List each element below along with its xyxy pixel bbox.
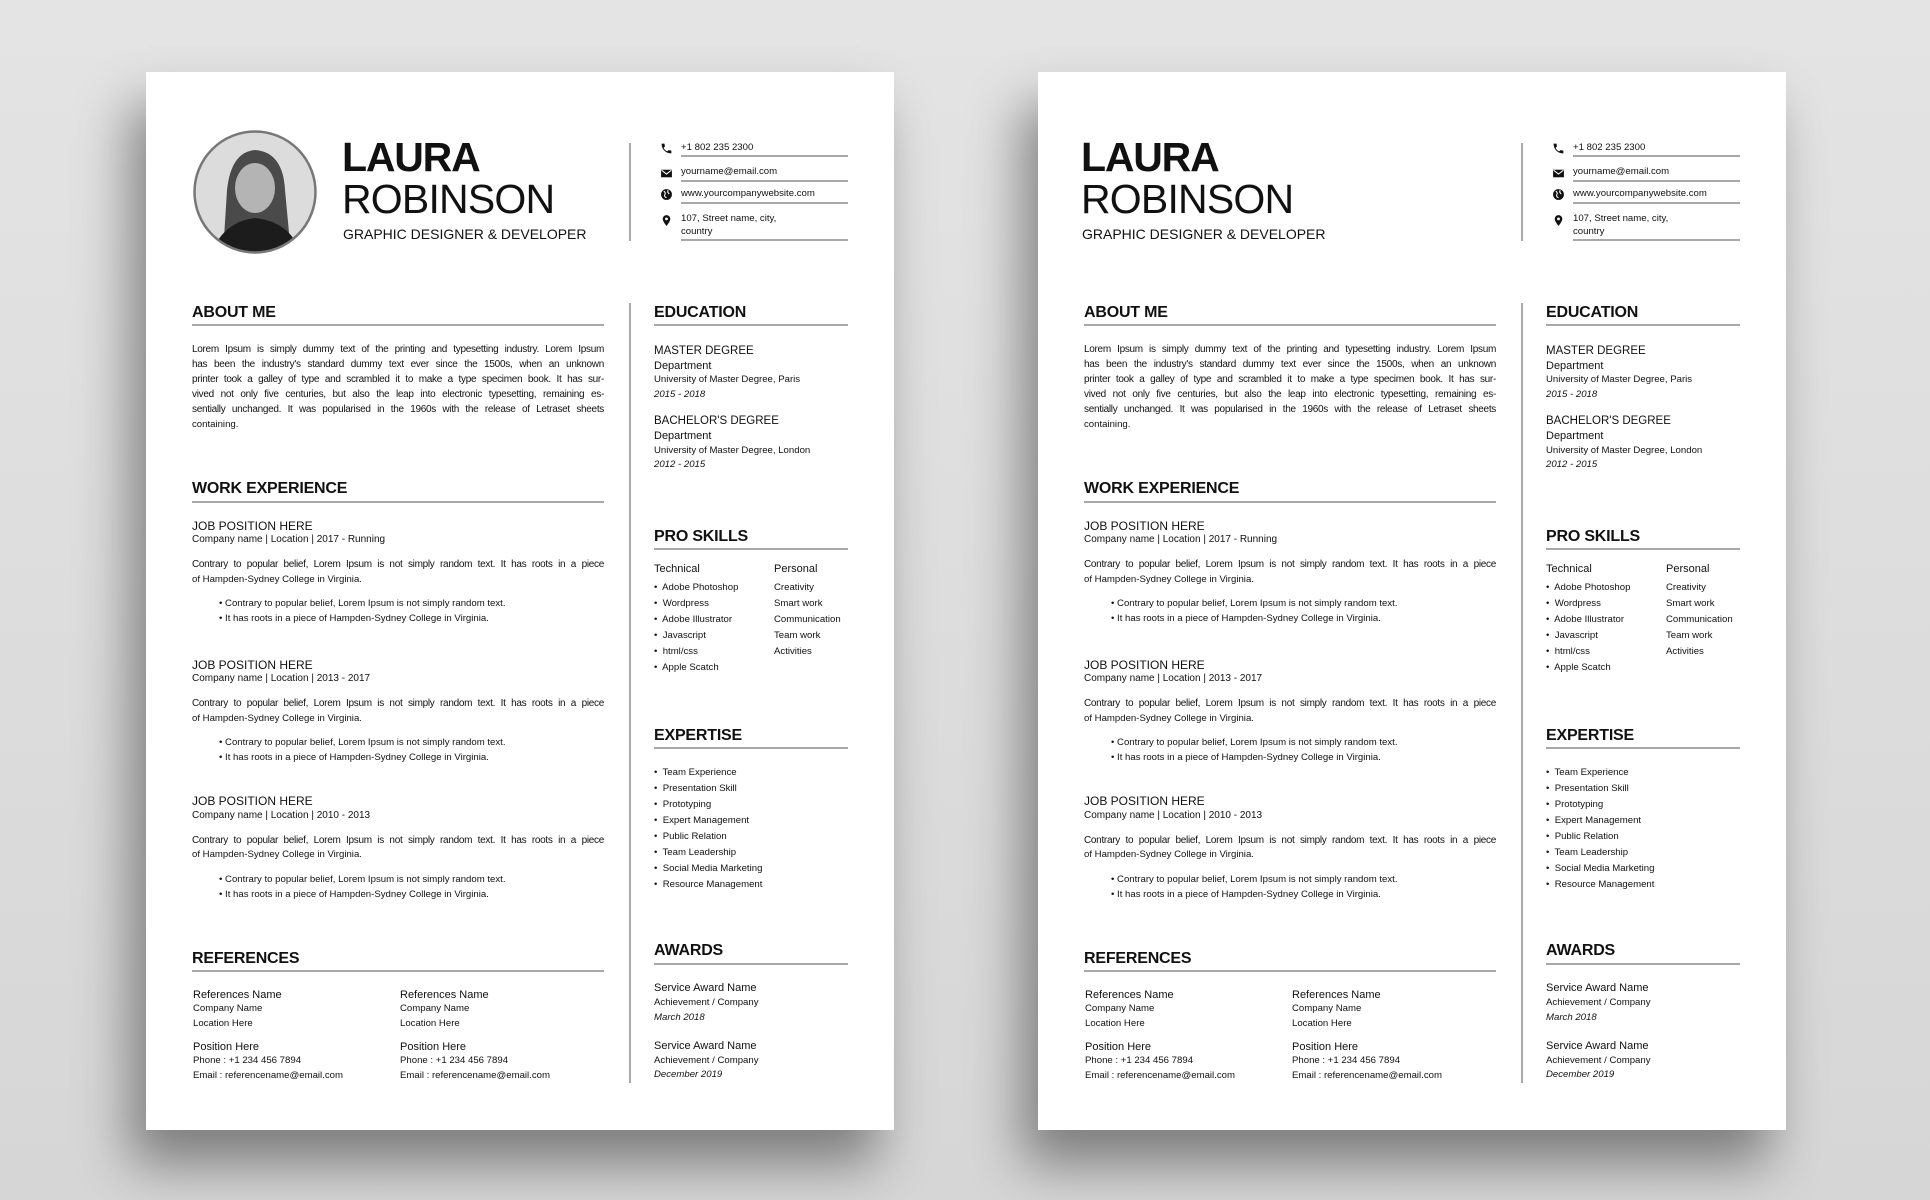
section: awards: March 2018 (1546, 1012, 1597, 1023)
section: work experience: WORK EXPERIENCE (192, 480, 347, 497)
section: pro skills: • Apple Scatch (1546, 662, 1611, 673)
section: references: Location Here (400, 1018, 460, 1029)
section: references (1084, 950, 1496, 1081)
section: references: Phone : +1 234 456 7894 (193, 1055, 301, 1066)
contacts: 107, Street name, city, (681, 213, 776, 224)
section: awards: Service Award Name (1546, 1040, 1649, 1052)
section: pro skills: • Adobe Illustrator (1546, 614, 1624, 625)
section: about me (1084, 304, 1496, 430)
job 1: • It has roots in a piece of Hampden-Sydney College in Virginia. (1111, 613, 1381, 624)
icon: email (661, 170, 672, 178)
section: pro skills: Technical (1546, 563, 1592, 575)
section: references: Email : referencename@email.com (400, 1070, 550, 1081)
section: awards (654, 942, 848, 1080)
section: expertise: • Social Media Marketing (654, 863, 762, 874)
section: pro skills: Smart work (774, 598, 823, 609)
icon: globe (661, 189, 672, 200)
section: pro skills: Smart work (1666, 598, 1715, 609)
section: expertise: • Team Experience (1546, 767, 1629, 778)
section: expertise: • Team Leadership (1546, 847, 1628, 858)
section: pro skills (654, 528, 848, 673)
section: education: EDUCATION (1546, 304, 1638, 321)
section: expertise: • Prototyping (1546, 799, 1603, 810)
section: references: Phone : +1 234 456 7894 (1085, 1055, 1193, 1066)
name (342, 134, 587, 242)
contacts: yourname@email.com (1573, 166, 1669, 177)
section: pro skills: • Adobe Illustrator (654, 614, 732, 625)
section: education: Department (1546, 430, 1603, 442)
job 2: • Contrary to popular belief, Lorem Ipsum is not simply random text. (219, 737, 506, 748)
section: references: Company Name (1292, 1003, 1361, 1014)
section: pro skills: • Adobe Photoshop (654, 582, 738, 593)
job 3: of Hampden-Sydney College in Virginia. (192, 849, 362, 860)
section: awards: Achievement / Company (654, 1055, 759, 1066)
panel: left resume page: GRAPHIC DESIGNER & DEVELOPER (343, 226, 587, 242)
job 3 (192, 794, 604, 900)
section: education: 2015 - 2018 (1546, 389, 1597, 400)
job 1: of Hampden-Sydney College in Virginia. (192, 574, 362, 585)
section: education: University of Master Degree, Paris (654, 374, 800, 385)
job 3: Company name | Location | 2010 - 2013 (1084, 810, 1262, 821)
job 1: • Contrary to popular belief, Lorem Ipsum is not simply random text. (219, 598, 506, 609)
section: references: Company Name (1085, 1003, 1154, 1014)
section: awards: Achievement / Company (1546, 1055, 1651, 1066)
name (1081, 134, 1326, 242)
job 2 (192, 658, 604, 763)
section: work experience (1084, 480, 1496, 900)
job 2: of Hampden-Sydney College in Virginia. (1084, 713, 1254, 724)
job 2: • It has roots in a piece of Hampden-Sydney College in Virginia. (219, 752, 489, 763)
section: education: EDUCATION (654, 304, 746, 321)
job 2: • It has roots in a piece of Hampden-Sydney College in Virginia. (1111, 752, 1381, 763)
job 3: of Hampden-Sydney College in Virginia. (1084, 849, 1254, 860)
section: awards: March 2018 (654, 1012, 705, 1023)
job 3: Contrary to popular belief, Lorem Ipsum is not simply random text. It has roots in a piece (192, 835, 604, 846)
job 3 (1084, 794, 1496, 900)
contacts: +1 802 235 2300 (681, 142, 753, 153)
panel: right resume page: LAURA (1081, 134, 1218, 180)
section: references: References Name (400, 989, 489, 1001)
job 1: Contrary to popular belief, Lorem Ipsum is not simply random text. It has roots in a piece (1084, 559, 1496, 570)
section: about me: printer took a galley of type and scrambled it to make a type specimen book. It has sur- (1084, 374, 1496, 385)
section: pro skills: • Apple Scatch (654, 662, 719, 673)
icon: email (1553, 170, 1564, 178)
job 2: Contrary to popular belief, Lorem Ipsum is not simply random text. It has roots in a piece (192, 698, 604, 709)
section: pro skills: Technical (654, 563, 700, 575)
section: education: 2012 - 2015 (654, 459, 705, 470)
section: references: Email : referencename@email.com (193, 1070, 343, 1081)
section: references (192, 950, 604, 1081)
section: pro skills: Team work (1666, 630, 1712, 641)
section: expertise: • Prototyping (654, 799, 711, 810)
section: education: University of Master Degree, London (1546, 445, 1702, 456)
section: education: MASTER DEGREE (1546, 345, 1646, 357)
section: pro skills: Communication (774, 614, 841, 625)
contacts: country (681, 226, 712, 237)
section: references: Company Name (193, 1003, 262, 1014)
contacts (661, 142, 848, 241)
job 3: • Contrary to popular belief, Lorem Ipsum is not simply random text. (219, 874, 506, 885)
section: expertise: EXPERTISE (654, 727, 742, 744)
panel: left resume page: LAURA (342, 134, 479, 180)
section: pro skills: Activities (774, 646, 812, 657)
panel: left resume page: containing. (192, 419, 238, 430)
section: work experience: WORK EXPERIENCE (1084, 480, 1239, 497)
job 3: • Contrary to popular belief, Lorem Ipsum is not simply random text. (1111, 874, 1398, 885)
section: references: Email : referencename@email.com (1085, 1070, 1235, 1081)
contacts: www.yourcompanywebsite.com (1573, 188, 1707, 199)
section: about me: Lorem Ipsum is simply dummy text of the printing and typesetting industry. Lorem Ipsum (192, 344, 604, 355)
section: education: Department (654, 430, 711, 442)
section: awards: Service Award Name (1546, 982, 1649, 994)
section: references: Phone : +1 234 456 7894 (400, 1055, 508, 1066)
job 1: Contrary to popular belief, Lorem Ipsum is not simply random text. It has roots in a piece (192, 559, 604, 570)
section: expertise: • Social Media Marketing (1546, 863, 1654, 874)
section: references: REFERENCES (192, 950, 299, 967)
job 3: JOB POSITION HERE (1084, 794, 1205, 808)
panel: right resume page: ROBINSON (1081, 176, 1293, 222)
section: references: REFERENCES (1084, 950, 1191, 967)
section: about me: ABOUT ME (1084, 304, 1168, 321)
section: awards: Achievement / Company (1546, 997, 1651, 1008)
section: awards: Achievement / Company (654, 997, 759, 1008)
section: expertise: • Expert Management (1546, 815, 1641, 826)
section: references: Position Here (193, 1041, 259, 1053)
section: references: Location Here (193, 1018, 253, 1029)
section: pro skills: Creativity (774, 582, 814, 593)
section: awards (1546, 942, 1740, 1080)
section: references: Position Here (1085, 1041, 1151, 1053)
job 2: of Hampden-Sydney College in Virginia. (192, 713, 362, 724)
job 1 (1084, 519, 1496, 624)
contacts: country (1573, 226, 1604, 237)
icon: location pin (1554, 215, 1562, 226)
icon: phone (662, 144, 672, 154)
icon: location pin (662, 215, 670, 226)
section: about me: has been the industry's standard dummy text ever since the 1500s, when an unknown (192, 359, 604, 370)
section: references: Phone : +1 234 456 7894 (1292, 1055, 1400, 1066)
panel: right resume page: containing. (1084, 419, 1130, 430)
job 2: Company name | Location | 2013 - 2017 (192, 673, 370, 684)
section: pro skills: • html/css (1546, 646, 1590, 657)
section: awards: Service Award Name (654, 982, 757, 994)
job 1: of Hampden-Sydney College in Virginia. (1084, 574, 1254, 585)
section: education: Department (654, 360, 711, 372)
panel: right resume page: GRAPHIC DESIGNER & DEVELOPER (1082, 226, 1326, 242)
contacts: www.yourcompanywebsite.com (681, 188, 815, 199)
panel: left resume page: ROBINSON (342, 176, 554, 222)
section: pro skills: PRO SKILLS (1546, 528, 1640, 545)
job 3: • It has roots in a piece of Hampden-Sydney College in Virginia. (1111, 889, 1381, 900)
section: pro skills: • Wordpress (654, 598, 709, 609)
job 3: JOB POSITION HERE (192, 794, 313, 808)
section: pro skills: Activities (1666, 646, 1704, 657)
job 3: Company name | Location | 2010 - 2013 (192, 810, 370, 821)
section: education: BACHELOR'S DEGREE (654, 415, 779, 427)
section: references: Location Here (1085, 1018, 1145, 1029)
section: pro skills: Personal (1666, 563, 1709, 575)
job 1: Company name | Location | 2017 - Running (192, 534, 385, 545)
contacts: 107, Street name, city, (1573, 213, 1668, 224)
section: about me: printer took a galley of type and scrambled it to make a type specimen book. It has sur- (192, 374, 604, 385)
section: education: University of Master Degree, London (654, 445, 810, 456)
section: about me: vived not only five centuries, but also the leap into electronic typesetting, remaining es- (1084, 389, 1496, 400)
section: awards: Service Award Name (654, 1040, 757, 1052)
section: education: MASTER DEGREE (654, 345, 754, 357)
section: expertise: • Team Leadership (654, 847, 736, 858)
panel: left resume page (146, 72, 894, 1130)
section: education: University of Master Degree, Paris (1546, 374, 1692, 385)
section: education (654, 304, 848, 470)
contacts (1553, 142, 1740, 241)
section: awards: December 2019 (1546, 1069, 1614, 1080)
section: references: Company Name (400, 1003, 469, 1014)
section: expertise: • Resource Management (1546, 879, 1654, 890)
contacts: +1 802 235 2300 (1573, 142, 1645, 153)
section: expertise: • Public Relation (654, 831, 727, 842)
section: expertise: • Expert Management (654, 815, 749, 826)
job 2 (1084, 658, 1496, 763)
job 2: Contrary to popular belief, Lorem Ipsum is not simply random text. It has roots in a piece (1084, 698, 1496, 709)
section: pro skills: Team work (774, 630, 820, 641)
section: about me: ABOUT ME (192, 304, 276, 321)
photo (193, 130, 317, 254)
section: expertise (654, 727, 848, 890)
section: expertise: • Team Experience (654, 767, 737, 778)
section: work experience (192, 480, 604, 900)
section: expertise: • Presentation Skill (654, 783, 737, 794)
section: expertise: • Resource Management (654, 879, 762, 890)
section: awards: AWARDS (654, 942, 723, 959)
section: about me: vived not only five centuries, but also the leap into electronic typesetting, remaining es- (192, 389, 604, 400)
icon: globe (1553, 189, 1564, 200)
section: pro skills: • Adobe Photoshop (1546, 582, 1630, 593)
section: about me: has been the industry's standard dummy text ever since the 1500s, when an unknown (1084, 359, 1496, 370)
job 1: JOB POSITION HERE (1084, 519, 1205, 533)
section: expertise: • Public Relation (1546, 831, 1619, 842)
job 1: • Contrary to popular belief, Lorem Ipsum is not simply random text. (1111, 598, 1398, 609)
job 3: Contrary to popular belief, Lorem Ipsum is not simply random text. It has roots in a piece (1084, 835, 1496, 846)
section: about me: sentially unchanged. It was popularised in the 1960s with the release of Letraset sheets (1084, 404, 1496, 415)
job 2: • Contrary to popular belief, Lorem Ipsum is not simply random text. (1111, 737, 1398, 748)
job 2: Company name | Location | 2013 - 2017 (1084, 673, 1262, 684)
section: awards: AWARDS (1546, 942, 1615, 959)
job 1: Company name | Location | 2017 - Running (1084, 534, 1277, 545)
section: about me (192, 304, 604, 430)
section: pro skills: Creativity (1666, 582, 1706, 593)
panel: right resume page (1038, 72, 1786, 1130)
section: references: Email : referencename@email.com (1292, 1070, 1442, 1081)
section: references: References Name (1085, 989, 1174, 1001)
job 1: JOB POSITION HERE (192, 519, 313, 533)
section: pro skills: • Javascript (654, 630, 706, 641)
section: pro skills (1546, 528, 1740, 673)
job 1 (192, 519, 604, 624)
section: about me: sentially unchanged. It was popularised in the 1960s with the release of Letraset sheets (192, 404, 604, 415)
section: references: Position Here (1292, 1041, 1358, 1053)
section: expertise (1546, 727, 1740, 890)
section: pro skills: PRO SKILLS (654, 528, 748, 545)
section: education: Department (1546, 360, 1603, 372)
section: pro skills: Personal (774, 563, 817, 575)
section: pro skills: • Wordpress (1546, 598, 1601, 609)
job 1: • It has roots in a piece of Hampden-Sydney College in Virginia. (219, 613, 489, 624)
section: pro skills: • html/css (654, 646, 698, 657)
job 2: JOB POSITION HERE (192, 658, 313, 672)
job 3: • It has roots in a piece of Hampden-Sydney College in Virginia. (219, 889, 489, 900)
section: education: 2012 - 2015 (1546, 459, 1597, 470)
contacts: yourname@email.com (681, 166, 777, 177)
section: expertise: EXPERTISE (1546, 727, 1634, 744)
section: awards: December 2019 (654, 1069, 722, 1080)
section: references: Position Here (400, 1041, 466, 1053)
section: education (1546, 304, 1740, 470)
icon: phone (1554, 144, 1564, 154)
section: education: BACHELOR'S DEGREE (1546, 415, 1671, 427)
section: about me: Lorem Ipsum is simply dummy text of the printing and typesetting industry. Lorem Ipsum (1084, 344, 1496, 355)
section: pro skills: Communication (1666, 614, 1733, 625)
job 2: JOB POSITION HERE (1084, 658, 1205, 672)
section: expertise: • Presentation Skill (1546, 783, 1629, 794)
section: education: 2015 - 2018 (654, 389, 705, 400)
section: references: Location Here (1292, 1018, 1352, 1029)
section: references: References Name (193, 989, 282, 1001)
section: references: References Name (1292, 989, 1381, 1001)
section: pro skills: • Javascript (1546, 630, 1598, 641)
